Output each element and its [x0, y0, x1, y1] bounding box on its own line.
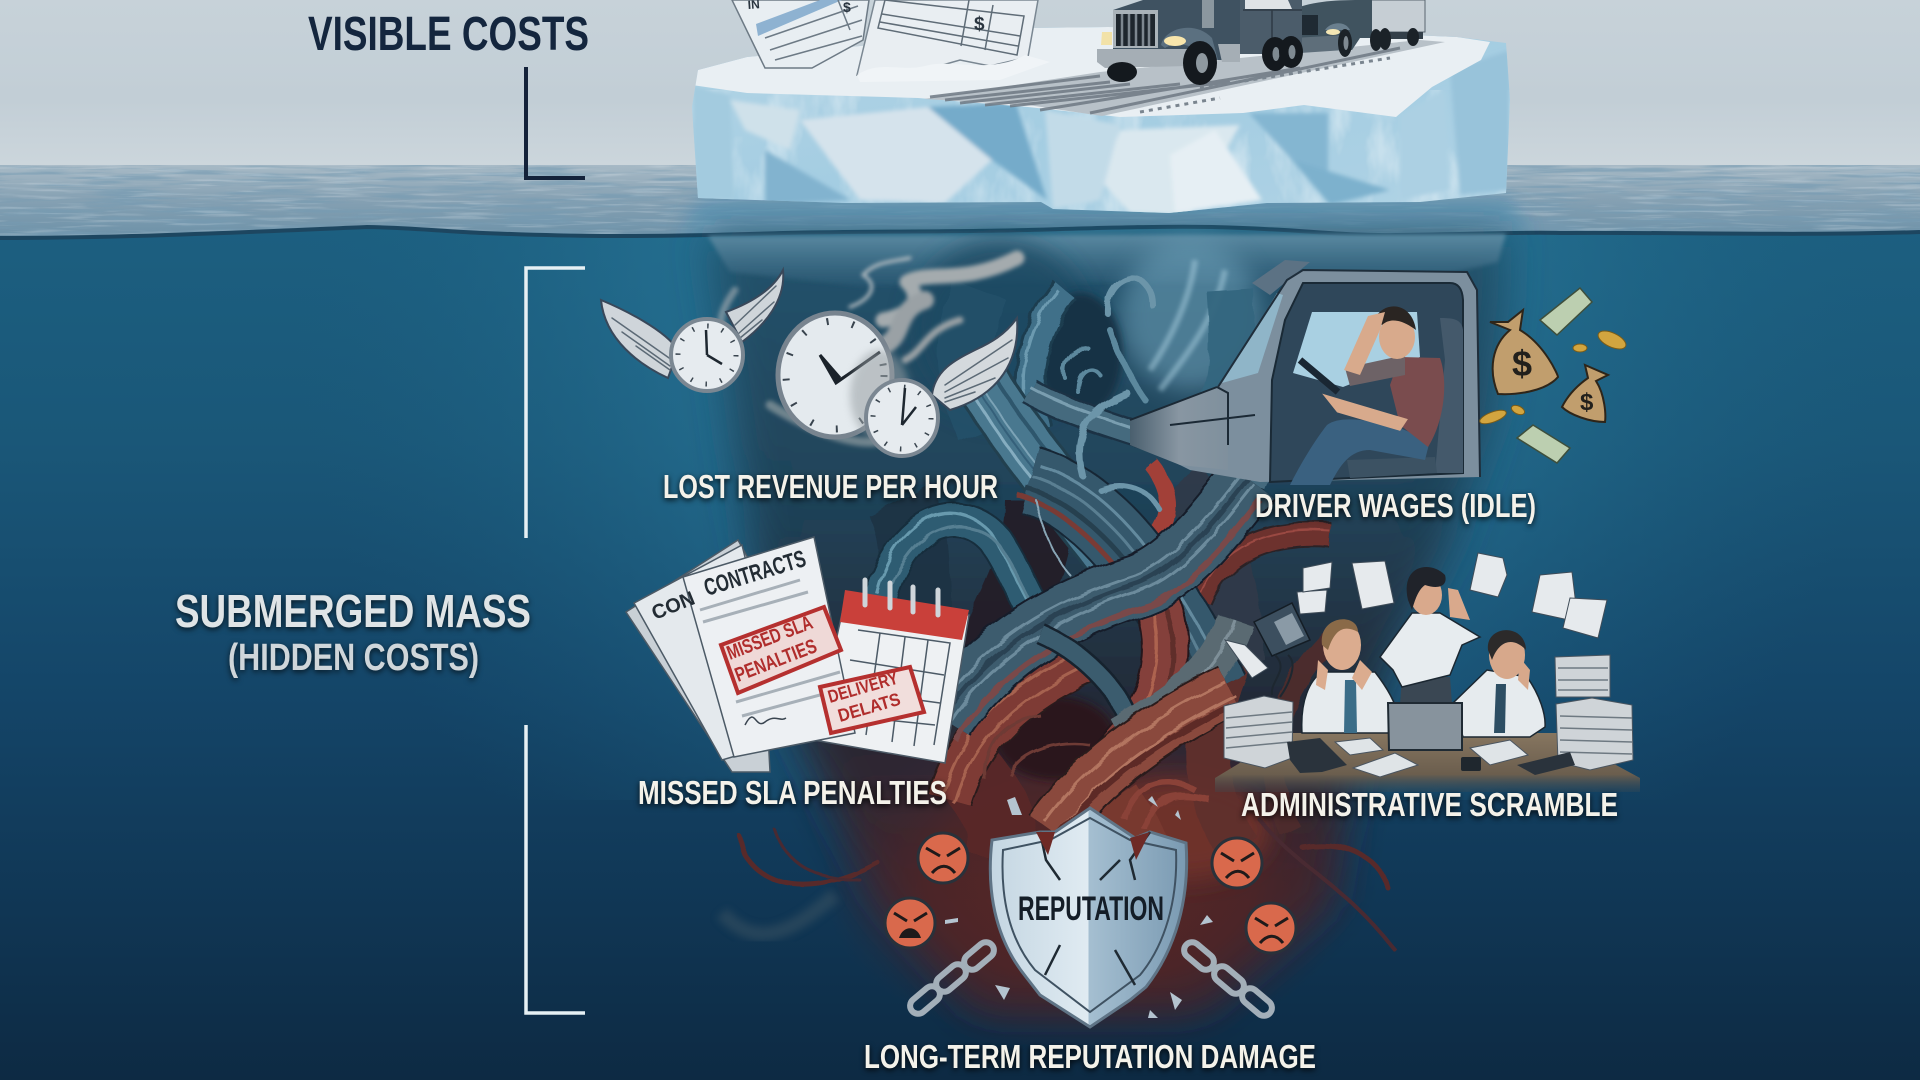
man right	[1453, 630, 1545, 737]
icon: broken reputation shield	[885, 796, 1296, 1027]
stamp: delivery delays: DELIVERY	[826, 668, 900, 707]
front truck	[1097, 0, 1303, 85]
invoice right	[857, 0, 1038, 75]
ice texture	[690, 90, 1515, 215]
main contract	[683, 537, 855, 757]
wing left small	[601, 300, 678, 378]
coins	[1478, 327, 1629, 426]
chain right	[1181, 939, 1275, 1019]
label: long-term reputation damage: LONG-TERM REPUTATION DAMAGE	[864, 1038, 1316, 1075]
tangled roots	[740, 278, 1395, 950]
icon: contracts and calendar	[626, 537, 969, 772]
label: submerged mass: SUBMERGED MASS	[175, 585, 531, 637]
trucks	[1097, 0, 1425, 85]
cab interior	[1270, 283, 1463, 482]
emoji angry 1	[918, 833, 968, 883]
iceberg body	[692, 27, 1510, 213]
flying papers	[1225, 553, 1607, 678]
thin tendrils	[740, 278, 1395, 950]
hood panel	[1130, 387, 1228, 470]
submerged iceberg mass	[708, 234, 1506, 1050]
label: missed sla penalties: MISSED SLA PENALTIES	[638, 774, 947, 811]
man left	[1302, 619, 1398, 733]
shield	[990, 808, 1187, 1027]
background: ocean surface	[0, 165, 1920, 240]
desk	[1215, 733, 1640, 792]
icon: flying clocks	[601, 258, 1017, 456]
iceberg above water	[690, 27, 1515, 215]
money bag large	[1490, 310, 1558, 394]
calendar	[814, 580, 969, 763]
bracket: visible costs	[526, 67, 585, 178]
contract text: CONTRACTS	[701, 545, 809, 602]
stamp: missed sla	[721, 607, 841, 693]
paper stacks	[1224, 655, 1633, 770]
label: hidden costs: (HIDDEN COSTS)	[228, 637, 479, 679]
diagonal trunk	[939, 470, 1260, 740]
stamp: delivery delays	[820, 667, 924, 733]
driver	[1290, 306, 1444, 485]
invoices	[732, 0, 1050, 82]
upper central trunk	[1016, 466, 1225, 704]
emoji angry 3	[1246, 903, 1296, 953]
steering wheel	[1300, 360, 1338, 392]
stamp: delivery delays: DELATS	[836, 689, 903, 726]
dollar sign: $	[1512, 343, 1532, 384]
background: sky	[0, 0, 1920, 166]
phone on wall	[1254, 603, 1310, 697]
cab window	[1293, 312, 1420, 387]
label: driver wages idle: DRIVER WAGES (IDLE)	[1255, 487, 1536, 524]
shield text: REPUTATION	[1018, 890, 1164, 928]
clock large	[778, 313, 910, 440]
stamp: missed sla: MISSED SLA	[724, 612, 816, 665]
label: administrative scramble: ADMINISTRATIVE SCRAMBLE	[1241, 786, 1618, 823]
red roots behind	[944, 463, 1330, 804]
seat	[1435, 318, 1463, 473]
roof visor	[1252, 260, 1310, 295]
woman	[1380, 567, 1480, 704]
bills	[1540, 288, 1592, 335]
cab body	[1130, 270, 1480, 482]
wing upper small	[726, 270, 783, 342]
tire tracks	[924, 40, 1445, 116]
clock small lower	[866, 380, 938, 456]
red trunk	[1052, 568, 1173, 834]
wing right large	[932, 318, 1017, 410]
emoji shouting	[885, 898, 935, 948]
label: lost revenue per hour: LOST REVENUE PER HOUR	[663, 468, 998, 505]
desk papers	[1335, 738, 1528, 777]
money bag small	[1562, 365, 1608, 422]
laptop	[1388, 703, 1462, 750]
snow top	[692, 27, 1490, 117]
smoke	[721, 258, 1017, 442]
back contract text: CON	[649, 588, 698, 625]
ice facets	[692, 50, 1510, 215]
icon: idle truck driver	[1130, 260, 1629, 485]
blue roots	[876, 290, 1270, 636]
dollar sign: $	[974, 14, 985, 35]
rear truck	[1293, 0, 1425, 57]
bracket: hidden costs upper	[526, 268, 585, 538]
chain left	[907, 939, 997, 1017]
icon: office scramble	[1215, 553, 1640, 792]
signature	[745, 717, 786, 725]
background: underwater	[0, 227, 1920, 1080]
filler bundles	[900, 290, 1330, 880]
stamp: missed sla: PENALTIES	[732, 635, 820, 687]
windshield	[1222, 293, 1283, 383]
dollar sign: $	[1580, 389, 1594, 416]
invoice left	[732, 0, 869, 68]
desk phones	[1287, 738, 1575, 775]
emoji angry 2	[1212, 838, 1262, 888]
mobile phone	[1461, 757, 1481, 771]
bracket: hidden costs lower	[526, 725, 585, 1013]
paper stack	[626, 540, 770, 772]
wispy lower-left mist	[722, 895, 835, 934]
shield shards	[945, 796, 1213, 1018]
clock small left	[671, 319, 743, 391]
label: visible costs heading: VISIBLE COSTS	[308, 8, 589, 61]
lower swoosh	[985, 620, 1236, 846]
